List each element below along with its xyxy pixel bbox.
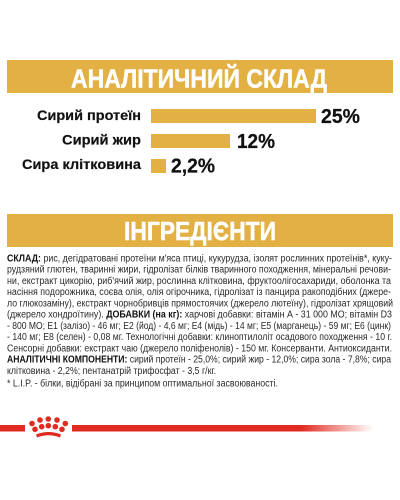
- footer line: right segment fading out: [72, 425, 373, 432]
- text block: ingredients and additives: клітковина - 2,2%; пентанатрій трифосфат - 3,5 г/кг.: [7, 366, 216, 377]
- text block: ingredients and additives: [7, 253, 393, 390]
- bar row: crude protein: 25%: [321, 106, 360, 128]
- icon: royal crown logo: [29, 416, 68, 438]
- bar row: crude fat: Сирий жир: [62, 132, 141, 148]
- bar row: crude protein: Сирий протеїн: [37, 107, 141, 123]
- footer line: left segment: [0, 425, 25, 432]
- heading: analytical composition: [7, 60, 393, 94]
- bar row: crude protein: [37, 106, 360, 128]
- heading: ingredients: [7, 214, 393, 247]
- heading: analytical composition: АНАЛІТИЧНИЙ СКЛАД: [71, 64, 327, 94]
- bar row: crude fat: [62, 131, 275, 153]
- bar row: crude fat: 12%: [237, 131, 275, 153]
- bar row: crude fibre: [22, 156, 215, 178]
- bar row: crude fibre: Сира клітковина: [22, 156, 141, 172]
- text block: ingredients and additives: * L.I.P. - білки, відібрані за принципом оптимальної засвоюваності.: [7, 378, 278, 390]
- heading: ingredients: ІНГРЕДІЄНТИ: [124, 218, 276, 246]
- bar row: crude fibre: 2,2%: [171, 156, 215, 178]
- bar chart: nutrient percentages: [22, 106, 360, 178]
